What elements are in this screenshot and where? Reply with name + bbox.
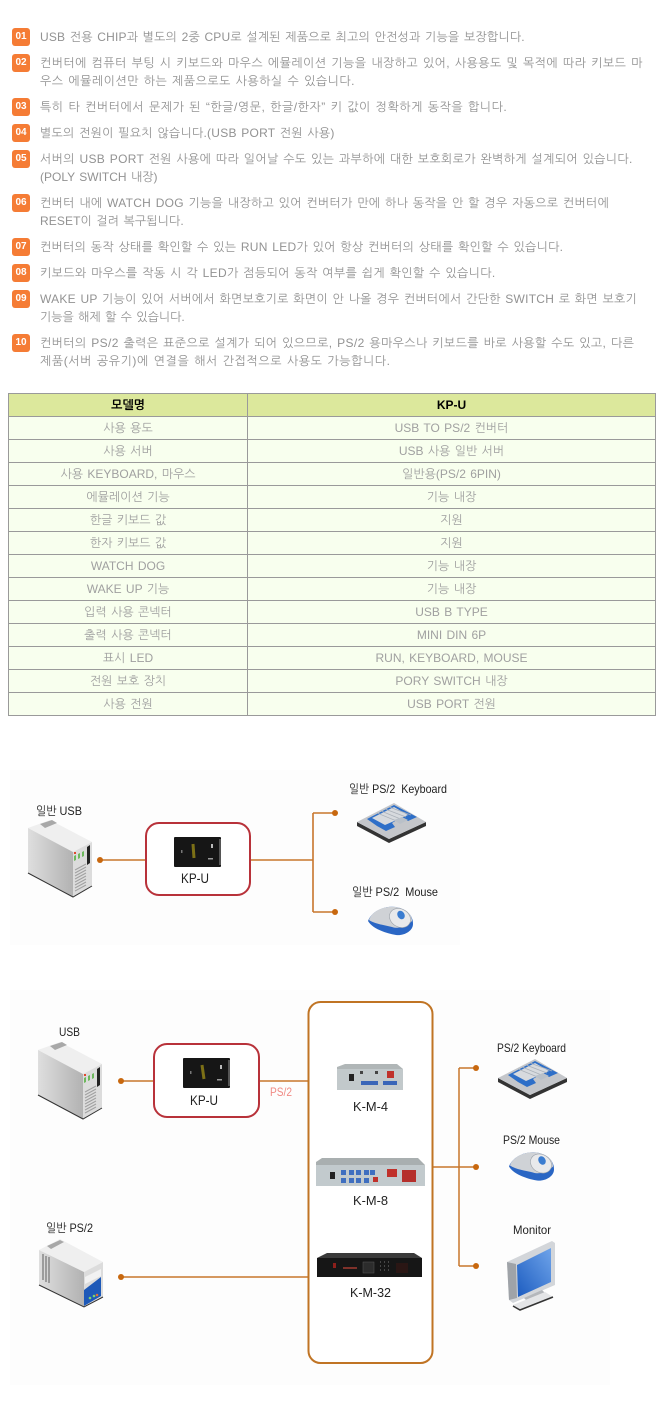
item 05: 서버의 USB PORT 전원 사용에 따라 일어날 수도 있는 과부하에 대한 보호회로가 완벽하게 설계되어 있습니다.	[40, 152, 633, 166]
item 05	[12, 150, 633, 184]
device: K-M-32: K-M-32	[350, 1285, 391, 1300]
connection lines	[118, 1065, 479, 1280]
label: PS/2 link: PS/2	[270, 1085, 292, 1099]
device: K-M-32	[317, 1253, 422, 1300]
photo: converter	[174, 837, 221, 867]
specification table: 사용 전원	[103, 696, 153, 710]
item 04: 별도의 전원이 필요치 않습니다.(USB PORT 전원 사용)	[40, 126, 335, 140]
specification table: 지원	[440, 536, 463, 550]
item 08: 08	[15, 267, 27, 278]
item 02	[12, 54, 643, 88]
specification table: USB TO PS/2 컨버터	[395, 420, 508, 434]
icon: monitor	[507, 1241, 555, 1310]
icon: keyboard	[498, 1059, 567, 1099]
specification table: KP-U	[437, 398, 466, 412]
item 06: 컨버터 내에 WATCH DOG 기능을 내장하고 있어 컨버터가 만에 하나 동작을 안 할 경우 자동으로 컨버터에	[40, 196, 609, 210]
KP-U converter box	[154, 1044, 259, 1117]
connection lines	[97, 810, 338, 915]
item 05: (POLY SWITCH 내장)	[40, 170, 157, 184]
KVM switch group	[308, 1002, 432, 1363]
item 05: 05	[15, 153, 27, 164]
icon: mouse	[368, 905, 414, 935]
item 10: 10	[15, 337, 27, 348]
specification table: 일반용(PS/2 6PIN)	[402, 466, 501, 480]
specification table: 한글 키보드 값	[90, 512, 166, 526]
icon: USB server	[28, 820, 92, 897]
item 09: WAKE UP 기능이 있어 서버에서 화면보호기로 화면이 안 나올 경우 컨버터에서 간단한 SWITCH 로 화면 보호기	[40, 292, 637, 306]
specification table: WAKE UP 기능	[87, 582, 169, 596]
specification table: 입력 사용 콘넥터	[84, 604, 172, 618]
label: PS/2 Mouse: PS/2 Mouse	[503, 1133, 560, 1147]
item 06: 06	[15, 197, 27, 208]
photo: converter	[183, 1058, 230, 1088]
device: K-M-4: K-M-4	[353, 1099, 388, 1114]
specification table: PORY SWITCH 내장	[395, 674, 508, 688]
specification table	[8, 393, 656, 716]
specification table: RUN, KEYBOARD, MOUSE	[375, 651, 528, 665]
label: USB server: 일반 USB	[36, 804, 82, 818]
specification table: 사용 KEYBOARD, 마우스	[60, 466, 196, 480]
specification table: 지원	[440, 512, 463, 526]
item 08: 키보드와 마우스를 작동 시 각 LED가 점등되어 동작 여부를 쉽게 확인할 수 있습니다.	[40, 266, 496, 280]
label: PS/2 Keyboard: PS/2 Keyboard	[497, 1041, 566, 1055]
specification table: 표시 LED	[103, 650, 153, 664]
specification table: 사용 용도	[103, 420, 153, 434]
specification table: 출력 사용 콘넥터	[84, 628, 172, 642]
item 06: RESET이 걸려 복구됩니다.	[40, 214, 184, 228]
KP-U converter box: KP-U	[190, 1092, 218, 1108]
device: K-M-4	[337, 1064, 403, 1114]
specification table: 전원 보호 장치	[90, 674, 166, 688]
specification table: 사용 서버	[103, 444, 153, 458]
item 02: 우스 에뮬레이션만 하는 제품으로도 사용하실 수 있습니다.	[40, 74, 355, 88]
label: keyboard: 일반 PS/2 Keyboard	[349, 782, 447, 796]
specification table: USB 사용 일반 서버	[399, 444, 504, 458]
item 09: 기능을 해제 할 수 있습니다.	[40, 310, 185, 324]
label: PS/2 server: 일반 PS/2	[46, 1221, 93, 1235]
feature list	[12, 28, 643, 368]
icon: mouse	[509, 1150, 555, 1181]
label: Monitor: Monitor	[513, 1223, 551, 1237]
icon: USB server	[38, 1042, 102, 1119]
device: K-M-8	[316, 1158, 425, 1208]
device: K-M-8: K-M-8	[353, 1193, 388, 1208]
diagram 1: direct connection	[10, 770, 460, 945]
item 09	[12, 290, 637, 324]
specification table: 기능 내장	[427, 558, 476, 572]
item 04: 04	[15, 127, 27, 138]
KP-U converter box	[146, 823, 250, 895]
label: USB: USB	[59, 1025, 80, 1039]
specification table: 기능 내장	[427, 490, 476, 504]
specification table: WATCH DOG	[91, 559, 165, 573]
item 02: 컨버터에 컴퓨터 부팅 시 키보드와 마우스 에뮬레이션 기능을 내장하고 있어, 사용용도 및 목적에 따라 키보드 마	[40, 56, 643, 70]
item 09: 09	[15, 293, 27, 304]
specification table: USB B TYPE	[415, 605, 488, 619]
item 07: 07	[15, 241, 27, 252]
item 03: 특히 타 컨버터에서 문제가 된 “한글/영문, 한글/한자” 키 값이 정확하게 동작을 합니다.	[40, 100, 507, 114]
label: mouse: 일반 PS/2 Mouse	[352, 885, 438, 899]
item 10: 컨버터의 PS/2 출력은 표준으로 설계가 되어 있으므로, PS/2 용마우스나 키보드를 바로 사용할 수도 있고, 다른	[40, 336, 634, 350]
KP-U converter box: KP-U	[181, 870, 209, 886]
specification table: 한자 키보드 값	[90, 536, 166, 550]
item 03: 03	[15, 101, 27, 112]
item 01: 01	[15, 31, 27, 42]
specification table: USB PORT 전원	[407, 696, 496, 710]
specification table: 에뮬레이션 기능	[86, 490, 170, 504]
diagram 2: KVM connection	[10, 990, 610, 1385]
icon: keyboard	[357, 803, 426, 843]
item 06	[12, 194, 609, 228]
item 02: 02	[15, 57, 27, 68]
item 10	[12, 334, 634, 368]
icon: PS/2 server	[39, 1239, 103, 1307]
item 01: USB 전용 CHIP과 별도의 2중 CPU로 설계된 제품으로 최고의 안전성과 기능을 보장합니다.	[40, 30, 525, 44]
specification table: MINI DIN 6P	[417, 628, 486, 642]
item 07: 컨버터의 동작 상태를 확인할 수 있는 RUN LED가 있어 항상 컨버터의 상태를 확인할 수 있습니다.	[40, 240, 563, 254]
specification table: 기능 내장	[427, 582, 476, 596]
specification table: 모델명	[111, 398, 145, 412]
item 10: 제품(서버 공유기)에 연결을 해서 간접적으로 사용도 가능합니다.	[40, 354, 391, 368]
